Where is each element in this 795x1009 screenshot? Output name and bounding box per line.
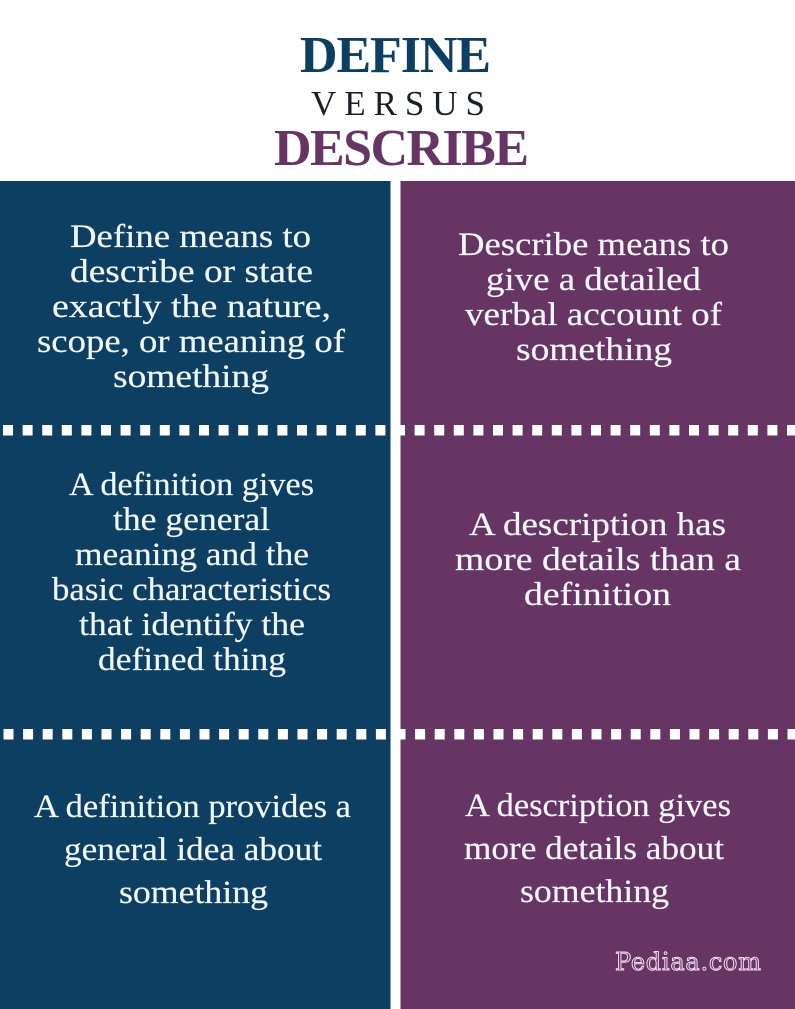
text: definition characteristics: defined thing [98,642,286,678]
text: definition characteristics: basic characteristics [52,572,331,608]
text: description more details: A description gives [465,788,731,824]
text: definition characteristics: A definition gives [69,467,314,503]
text: definition general idea [34,789,351,911]
text: definition general idea: A definition provides a [34,789,351,825]
text: definition general idea: general idea about [64,832,322,868]
heading: define: DEFINE [300,27,492,84]
text: definition general idea: something [119,875,268,911]
text: description details: A description has [469,507,726,543]
text: definition characteristics: that identify the [79,607,305,643]
divider: second row [4,729,795,740]
text: description details: more details than a [455,542,741,578]
text: describe meaning: Describe means to [458,227,729,263]
text: define meaning: exactly the nature, [52,289,331,325]
divider: first row [3,425,795,436]
text: description details [455,507,741,613]
title [274,27,530,177]
logo: Pediaa.com: Pediaa.com [615,948,761,976]
text: description more details: something [520,874,669,910]
text: description details: definition [524,577,671,613]
text: define meaning: scope, or meaning of [37,324,345,360]
text: define meaning: Define means to [70,219,311,255]
text: define meaning: something [113,359,269,395]
text: definition characteristics [52,467,331,678]
heading: describe: DESCRIBE [274,120,530,177]
text: describe meaning: verbal account of [465,297,722,333]
panel: describe column [400,181,795,1009]
text: define meaning [37,219,345,395]
text: definition characteristics: the general [113,502,270,538]
panel: define column [0,181,390,1009]
text: description more details: more details about [464,831,724,867]
heading: versus: VERSUS [311,84,485,123]
text: describe meaning [458,227,729,368]
text: description more details [464,788,731,910]
text: define meaning: describe or state [70,254,313,290]
text: describe meaning: something [516,332,672,368]
text: definition characteristics: meaning and the [75,537,309,573]
text: describe meaning: give a detailed [486,262,702,298]
